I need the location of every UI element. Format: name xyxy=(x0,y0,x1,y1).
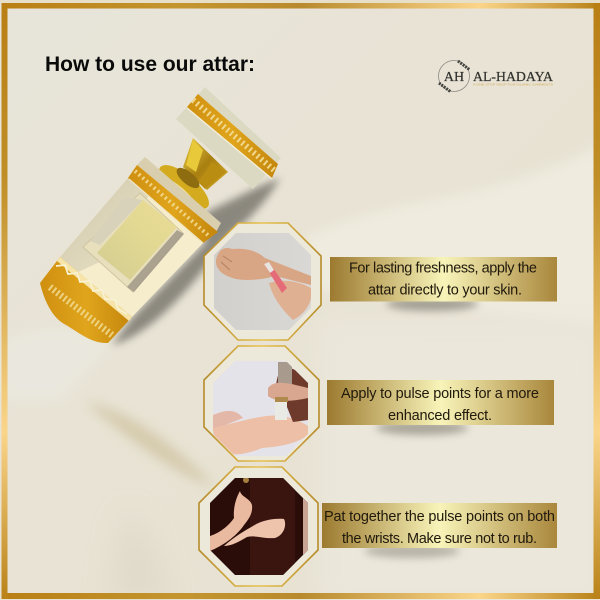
logo wordmark: AL-HADAYA xyxy=(473,69,553,84)
logo initials: AH xyxy=(444,70,464,85)
photo: applying to pulse points xyxy=(213,361,308,456)
cap xyxy=(176,87,281,189)
octagon frame xyxy=(204,223,321,340)
logo tagline: A ONE STOP SHOP FOR ISLAMIC GARMENTS xyxy=(473,82,553,86)
photo: applying attar on wrist xyxy=(214,233,311,330)
logo leaves top xyxy=(458,61,470,70)
neck collar xyxy=(153,158,215,216)
step 2 caption: Apply to pulse points for a more xyxy=(341,386,539,402)
fabric background xyxy=(86,398,216,600)
step 3 caption: the wrists. Make sure not to rub. xyxy=(342,531,537,547)
perfume bottle xyxy=(40,87,281,345)
step 1 image panel xyxy=(204,223,321,340)
bottle shadow xyxy=(112,178,280,345)
step 3 caption: Pat together the pulse points on both xyxy=(324,509,555,525)
step 1 caption xyxy=(330,257,557,311)
step 2 image panel xyxy=(204,346,319,461)
glass body xyxy=(60,178,203,317)
neck xyxy=(183,138,228,190)
logo emblem ring xyxy=(438,60,470,92)
photo: patting wrists together xyxy=(210,477,308,575)
step 3 image panel xyxy=(199,467,318,586)
logo leaves bottom xyxy=(439,83,451,92)
base band xyxy=(40,257,132,343)
step 1 caption: For lasting freshness, apply the xyxy=(349,260,537,276)
perfume liquid xyxy=(97,200,177,280)
inner vial xyxy=(83,193,183,292)
step 3 caption xyxy=(322,503,557,558)
title: How to use our attar: xyxy=(45,53,255,76)
step 2 caption xyxy=(327,380,554,435)
step 2 caption: enhanced effect. xyxy=(388,408,492,424)
body collar band xyxy=(137,157,221,232)
logo: Al-Hadaya xyxy=(438,60,553,92)
octagon frame xyxy=(204,346,319,461)
step 1 caption: attar directly to your skin. xyxy=(368,282,522,298)
octagon frame xyxy=(199,467,318,586)
